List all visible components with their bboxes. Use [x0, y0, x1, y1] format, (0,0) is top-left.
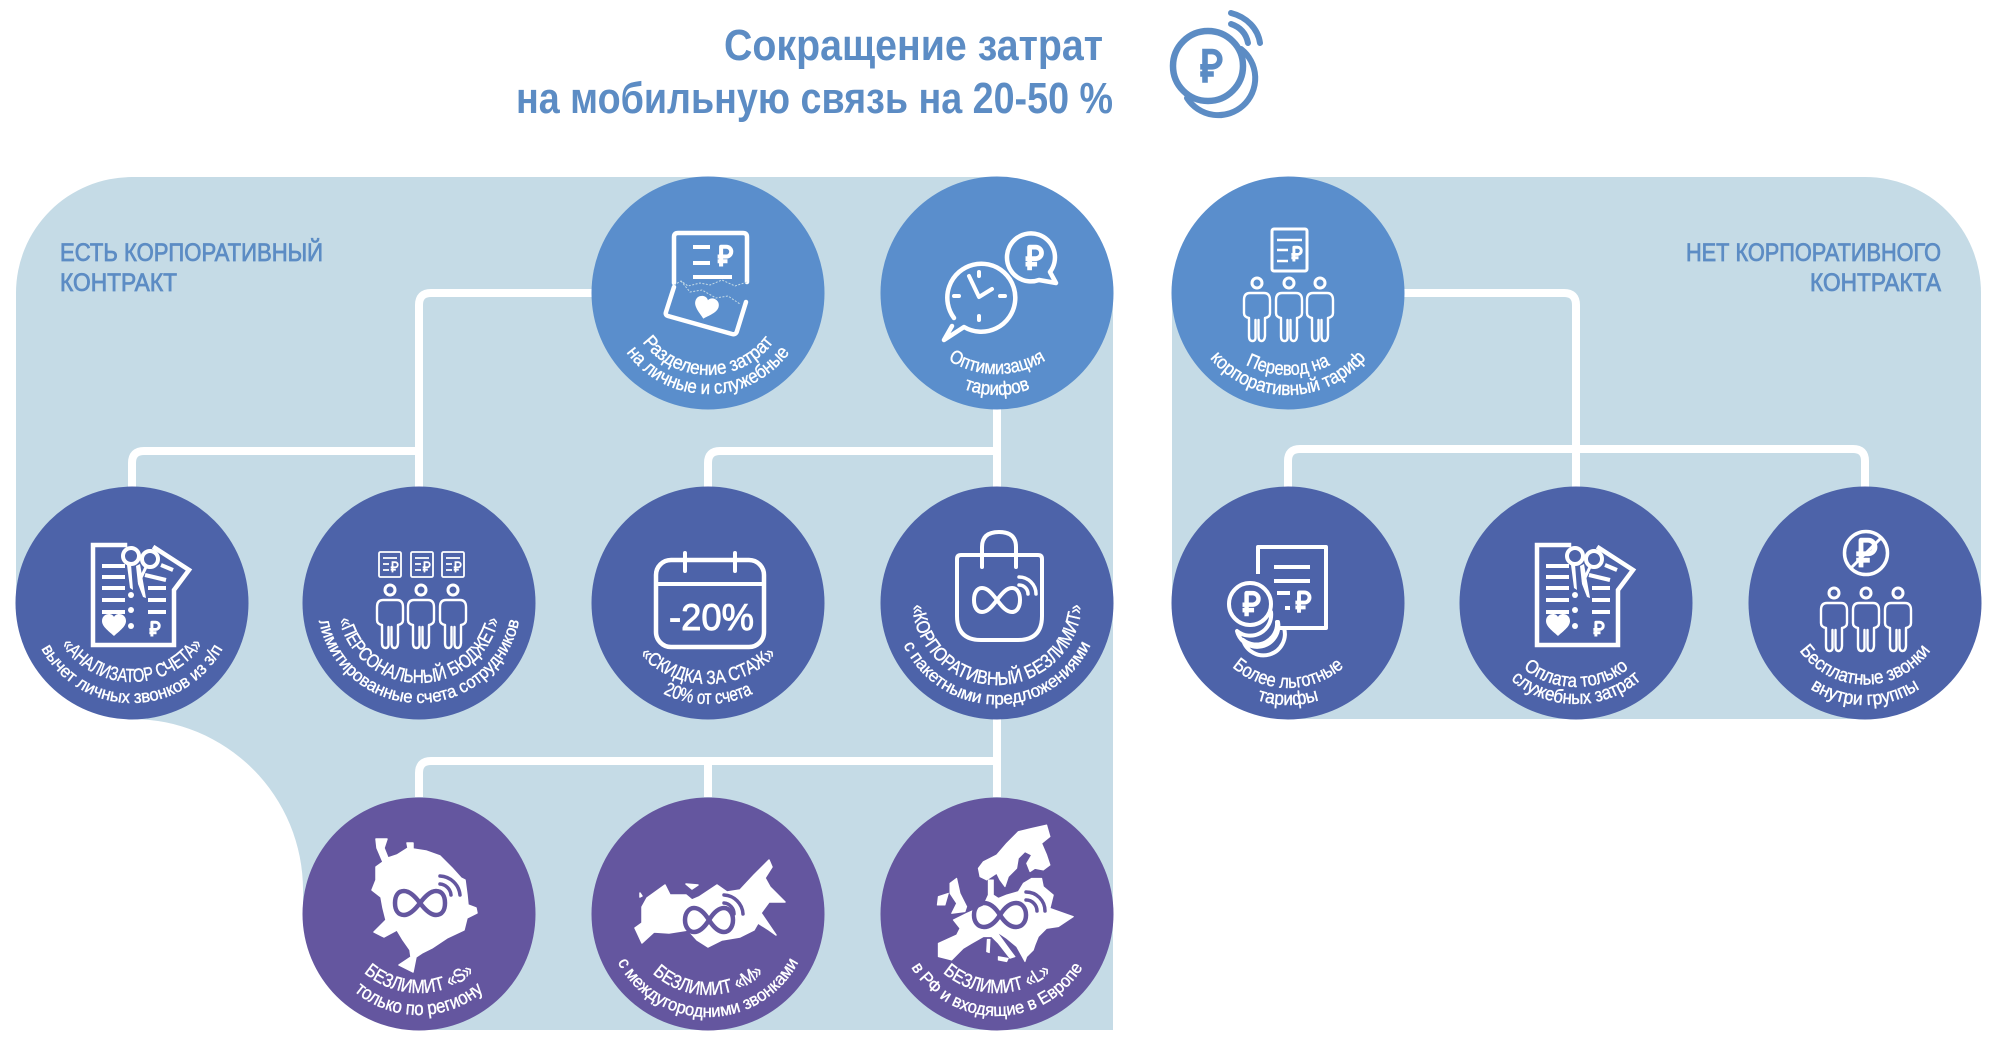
node: corporate tariff transfer — [1172, 176, 1404, 410]
node: unlimited L — [880, 798, 1114, 1030]
node: unlimited M — [592, 798, 824, 1030]
heading: has corporate contract — [60, 237, 323, 297]
icon: bill with scissors — [93, 545, 189, 645]
label: corporate unlimited: «КОРПОРАТИВНЫЙ БЕЗЛИМИТ» с пакетными предложениями — [904, 605, 1090, 708]
connector lines — [132, 293, 1865, 797]
label: better tariffs: Более льготные тарифы — [1232, 657, 1342, 708]
node: unlimited S — [302, 798, 536, 1030]
icon: bill with scissors — [1537, 545, 1633, 645]
icon: torn bill with heart — [666, 233, 747, 334]
heading: has corporate contract: ЕСТЬ КОРПОРАТИВНЫЙ — [60, 237, 323, 267]
icon: europe map with infinity — [937, 825, 1073, 962]
panel: no corporate contract background — [1172, 177, 1981, 719]
icon: shopping bag with infinity — [957, 532, 1042, 640]
label: corporate tariff transfer: Перевод накорпоративный тариф — [1210, 352, 1365, 396]
label: split costs: Разделение затратна личные и служебные — [626, 334, 788, 395]
icon: document and three people — [1244, 229, 1333, 341]
icon: calendar -20% — [656, 553, 764, 647]
title — [516, 21, 1113, 123]
icon: crossed ruble and people — [1821, 532, 1911, 651]
label: free group calls: Бесплатные звонки внутри группы — [1800, 643, 1930, 709]
node: better tariffs — [1172, 486, 1404, 720]
label: unlimited L: БЕЗЛИМИТ «L»в РФ и входящие в Европе — [912, 962, 1082, 1020]
heading: no corporate contract — [1686, 239, 1941, 297]
node: loyalty discount — [592, 486, 824, 720]
node: corporate unlimited — [880, 486, 1114, 720]
title: на мобильную связь на 20-50 % — [516, 74, 1113, 123]
icon: russia map with infinity — [635, 860, 785, 947]
node: pay only business costs — [1460, 486, 1692, 720]
icon: clock and ruble speech bubbles — [944, 233, 1056, 340]
label: bill analyser: «АНАЛИЗАТОР СЧЕТА»вычет личных звонков из з/п — [42, 642, 222, 704]
icon: calendar -20%: -20% — [669, 597, 754, 638]
panel: corporate contract background — [16, 177, 1113, 1030]
node: bill analyser — [16, 486, 248, 720]
icon: document and coin stack — [1229, 547, 1326, 655]
heading: no corporate contract: КОНТРАКТА — [1810, 269, 1941, 297]
node: personal budget — [302, 486, 536, 720]
title: Сокращение затрат — [724, 21, 1103, 70]
label: loyalty discount: «СКИДКА ЗА СТАЖ» 20% от счета — [642, 650, 774, 704]
label: unlimited S: БЕЗЛИМИТ «S»только по региону — [356, 962, 482, 1019]
label: personal budget: «ПЕРСОНАЛЬНЫЙ БЮДЖЕТ»лимитированные счета сотрудников — [318, 618, 519, 704]
label: unlimited M: БЕЗЛИМИТ «M»с междугородними звонками — [618, 958, 798, 1021]
icon: three documents and people — [377, 552, 466, 648]
label: pay only business costs: Оплата толькослужебных затрат — [1512, 660, 1640, 704]
icon: region map with infinity — [372, 839, 477, 972]
label: tariff optimisation: Оптимизация тарифов — [950, 350, 1046, 399]
node: split costs — [592, 176, 824, 410]
icon: ruble coins with signal — [1173, 13, 1260, 115]
heading: no corporate contract: НЕТ КОРПОРАТИВНОГО — [1686, 239, 1941, 267]
node: free group calls — [1748, 486, 1982, 720]
heading: has corporate contract: КОНТРАКТ — [60, 269, 177, 297]
node: tariff optimisation — [880, 176, 1114, 410]
